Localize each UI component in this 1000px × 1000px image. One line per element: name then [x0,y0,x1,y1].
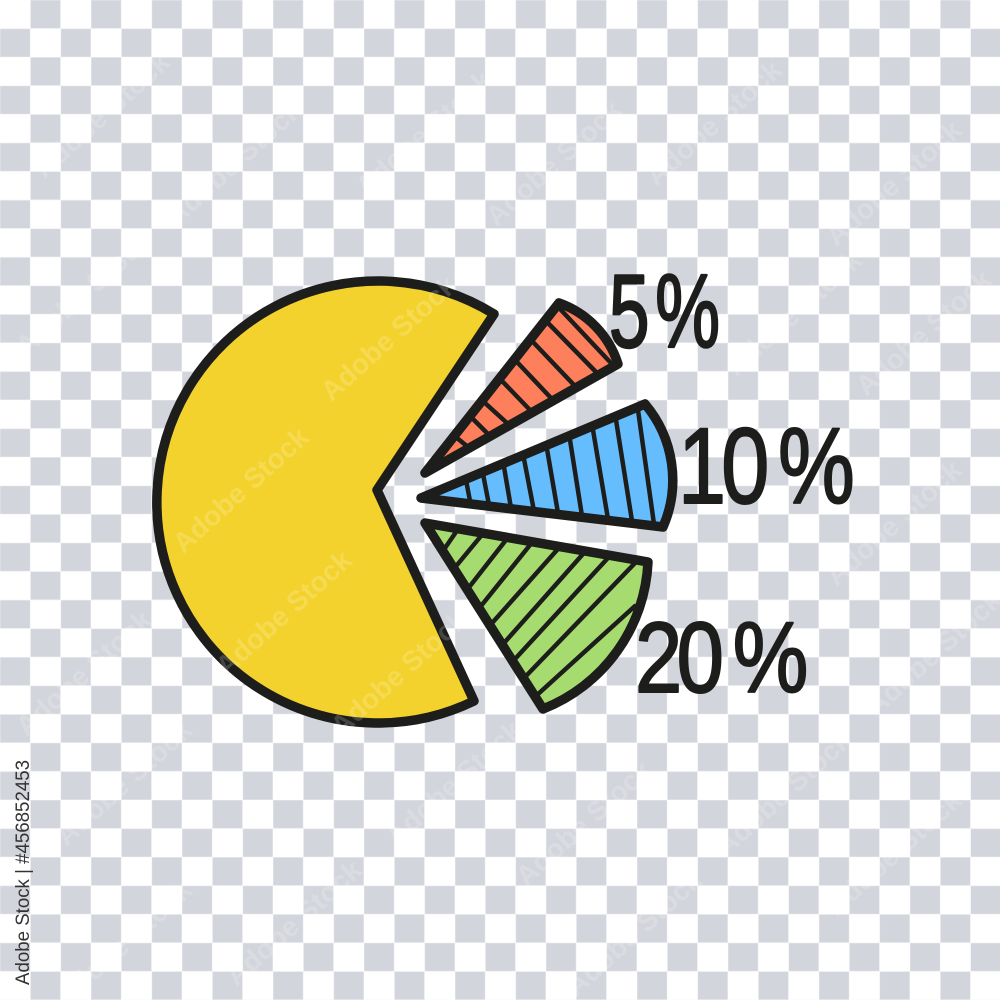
stock watermark repeated: Adobe Stock [480,94,628,232]
stock watermark repeated: Adobe Stock [850,264,998,402]
stock watermark repeated: Adobe Stock [720,244,868,382]
side credit text: Adobe Stock | #456852453 [13,760,34,985]
stock watermark repeated: Adobe Stock [820,454,968,592]
blue 10% slice [421,404,673,527]
stock watermark repeated: Adobe Stock [510,754,658,892]
stock watermark repeated: Adobe Stock [315,269,463,407]
stock watermark repeated: Adobe Stock [820,784,968,922]
pie chart main yellow slice [157,281,494,723]
label: 5%: 5% [609,254,720,370]
stock watermark repeated: Adobe Stock [350,64,498,202]
stock watermark repeated: Adobe Stock [380,714,528,852]
stock watermark repeated: Adobe Stock [10,224,158,362]
stock watermark repeated: Adobe Stock [820,114,968,252]
stock watermark repeated: Adobe Stock [325,604,473,742]
label: 20%: 20% [635,601,808,714]
label: 10%: 10% [678,405,855,526]
red 5% slice [425,303,618,473]
stock watermark repeated: Adobe Stock [640,54,788,192]
stock watermark repeated: Adobe Stock [220,854,368,992]
stock watermark repeated: Adobe Stock [50,714,198,852]
stock watermark repeated: Adobe Stock [167,421,315,559]
stock watermark repeated: Adobe Stock [160,94,308,232]
stock watermark repeated: Adobe Stock [210,544,358,682]
green 20% slice [425,523,648,709]
stock watermark repeated: Adobe Stock [10,604,158,742]
stock watermark repeated: Adobe Stock [28,46,176,184]
stock watermark repeated: Adobe Stock [560,864,708,1000]
stock watermark repeated: Adobe Stock [710,724,858,862]
